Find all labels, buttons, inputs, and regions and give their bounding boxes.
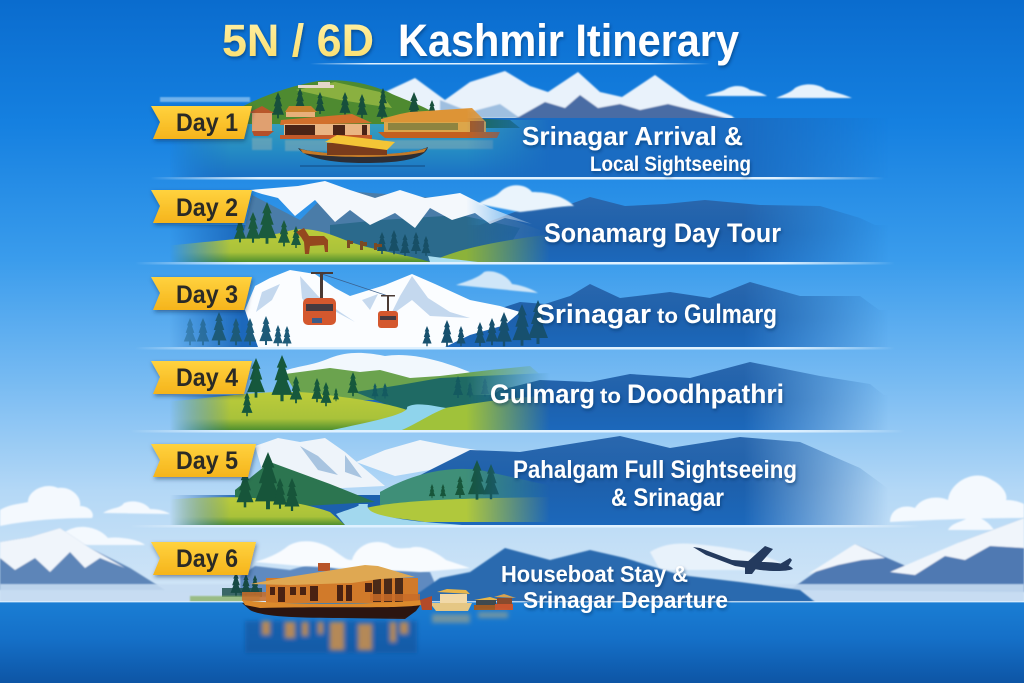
meadow right (440, 236, 544, 262)
day 4 title: to (600, 385, 621, 408)
title highlight: duration: 5N / 6D (222, 15, 374, 66)
day 1 title: Srinagar Arrival & (522, 121, 743, 151)
badge: day 6 (151, 542, 256, 575)
clouds (286, 352, 470, 378)
day 4 title: Doodhpathri (627, 379, 784, 409)
deer (347, 240, 382, 250)
day 1 clouds (705, 84, 852, 98)
day 1 blue band (471, 118, 854, 177)
day 3 title: Gulmarg (684, 299, 777, 329)
day 2 dark mountain band (165, 197, 890, 262)
snow slopes (245, 270, 520, 347)
day 2 title: Sonamarg Day Tour (544, 218, 781, 248)
houseboat (242, 563, 421, 619)
badge: day 4: Day 4 (176, 364, 238, 392)
right snow mountains (790, 518, 1024, 592)
badge: day 3: Day 3 (176, 281, 238, 309)
day 5 title: Pahalgam Full Sightseeing (513, 456, 797, 484)
day 6 title (501, 561, 728, 613)
shore trees (222, 572, 262, 597)
day 1 title: Local Sightseeing (590, 153, 751, 176)
day 6 title: Houseboat Stay & (501, 561, 688, 587)
day 5 dark mountain band (165, 436, 890, 525)
river (332, 404, 446, 430)
meadow left (165, 229, 430, 262)
day 4 title: Gulmarg (490, 379, 595, 409)
right trees (422, 300, 548, 346)
balcony (242, 592, 420, 601)
houseboat middle (280, 106, 372, 139)
badge: day 5: Day 5 (176, 447, 238, 475)
green hill with trees (244, 80, 430, 124)
day 4 title (490, 379, 784, 409)
left snow mountain (0, 528, 165, 590)
meadow right (402, 396, 544, 430)
day 1 title (522, 121, 751, 176)
small boats (420, 589, 516, 611)
meadow left (165, 497, 345, 525)
badge: day 5 (151, 444, 256, 477)
text: day titles (490, 121, 797, 613)
day 4 scene (165, 353, 570, 430)
lake water (0, 602, 1024, 683)
panel: day 6 scene (0, 518, 1024, 683)
forest slope (235, 463, 375, 506)
roof (250, 565, 415, 585)
lake (191, 120, 536, 177)
day 3 dark mountain band (165, 282, 890, 347)
badge: day 6: Day 6 (176, 545, 238, 573)
tree group (242, 355, 358, 416)
clouds behind houseboat (255, 541, 470, 572)
day 5 scene (165, 452, 570, 525)
reflections (252, 138, 493, 151)
day 5 title: & Srinagar (611, 484, 724, 512)
panel: day 1 (160, 71, 890, 178)
rocky mountains (244, 192, 534, 240)
hull (242, 603, 421, 619)
snow caps (250, 181, 532, 228)
panel: day 2 (165, 181, 890, 262)
horse (296, 228, 328, 254)
day 5 title (513, 456, 797, 512)
far blue hills (240, 563, 440, 597)
badge: day 2: Day 2 (176, 194, 238, 222)
cabin (266, 578, 418, 603)
houseboat right (378, 108, 500, 138)
title main text: Kashmir Itinerary (398, 15, 739, 66)
dark central mountain (417, 548, 815, 602)
day 5 scene back: snow mountains (255, 438, 490, 490)
badge: day 4 (151, 361, 252, 394)
day 2 cloud (478, 185, 574, 212)
meadow left (165, 392, 410, 430)
houseboat left small (248, 106, 274, 136)
cable line (322, 274, 388, 296)
badge: day 3 (151, 277, 252, 310)
trees (236, 452, 300, 511)
river (428, 256, 478, 262)
airplane (693, 546, 793, 574)
day 3 scene (184, 270, 548, 347)
houseboat reflection (245, 612, 508, 653)
badge: day 1 (151, 106, 252, 139)
background clouds left (0, 486, 170, 545)
panel: day 5 (165, 436, 890, 525)
river (336, 504, 462, 525)
chimney (318, 563, 330, 571)
day 2 scene (165, 181, 570, 262)
pine trees (234, 202, 301, 248)
panel: day 3 (165, 270, 890, 347)
day 3 cloud (456, 271, 538, 293)
day 3 title (536, 299, 777, 329)
title (222, 15, 739, 66)
green hills (287, 366, 538, 400)
day 3 title: Srinagar (536, 299, 652, 329)
badge: day 1: Day 1 (176, 109, 238, 137)
day badges (151, 106, 256, 575)
day 6 title: Srinagar Departure (523, 587, 728, 613)
mist strip above water (0, 584, 1024, 603)
background clouds right (890, 476, 1024, 530)
large gondola (303, 272, 336, 325)
day 3 title: to (657, 305, 678, 328)
badge: day 2 (151, 190, 252, 223)
small gondola (378, 295, 398, 328)
left trees (184, 312, 292, 346)
day 4 dark mountain band (165, 362, 890, 430)
panel: day 4 (165, 353, 890, 430)
shikara boat (298, 135, 428, 163)
day 1 snow mountains (385, 71, 735, 119)
day 1 scene (191, 80, 536, 177)
separators (130, 177, 920, 528)
meadow right (368, 497, 545, 522)
